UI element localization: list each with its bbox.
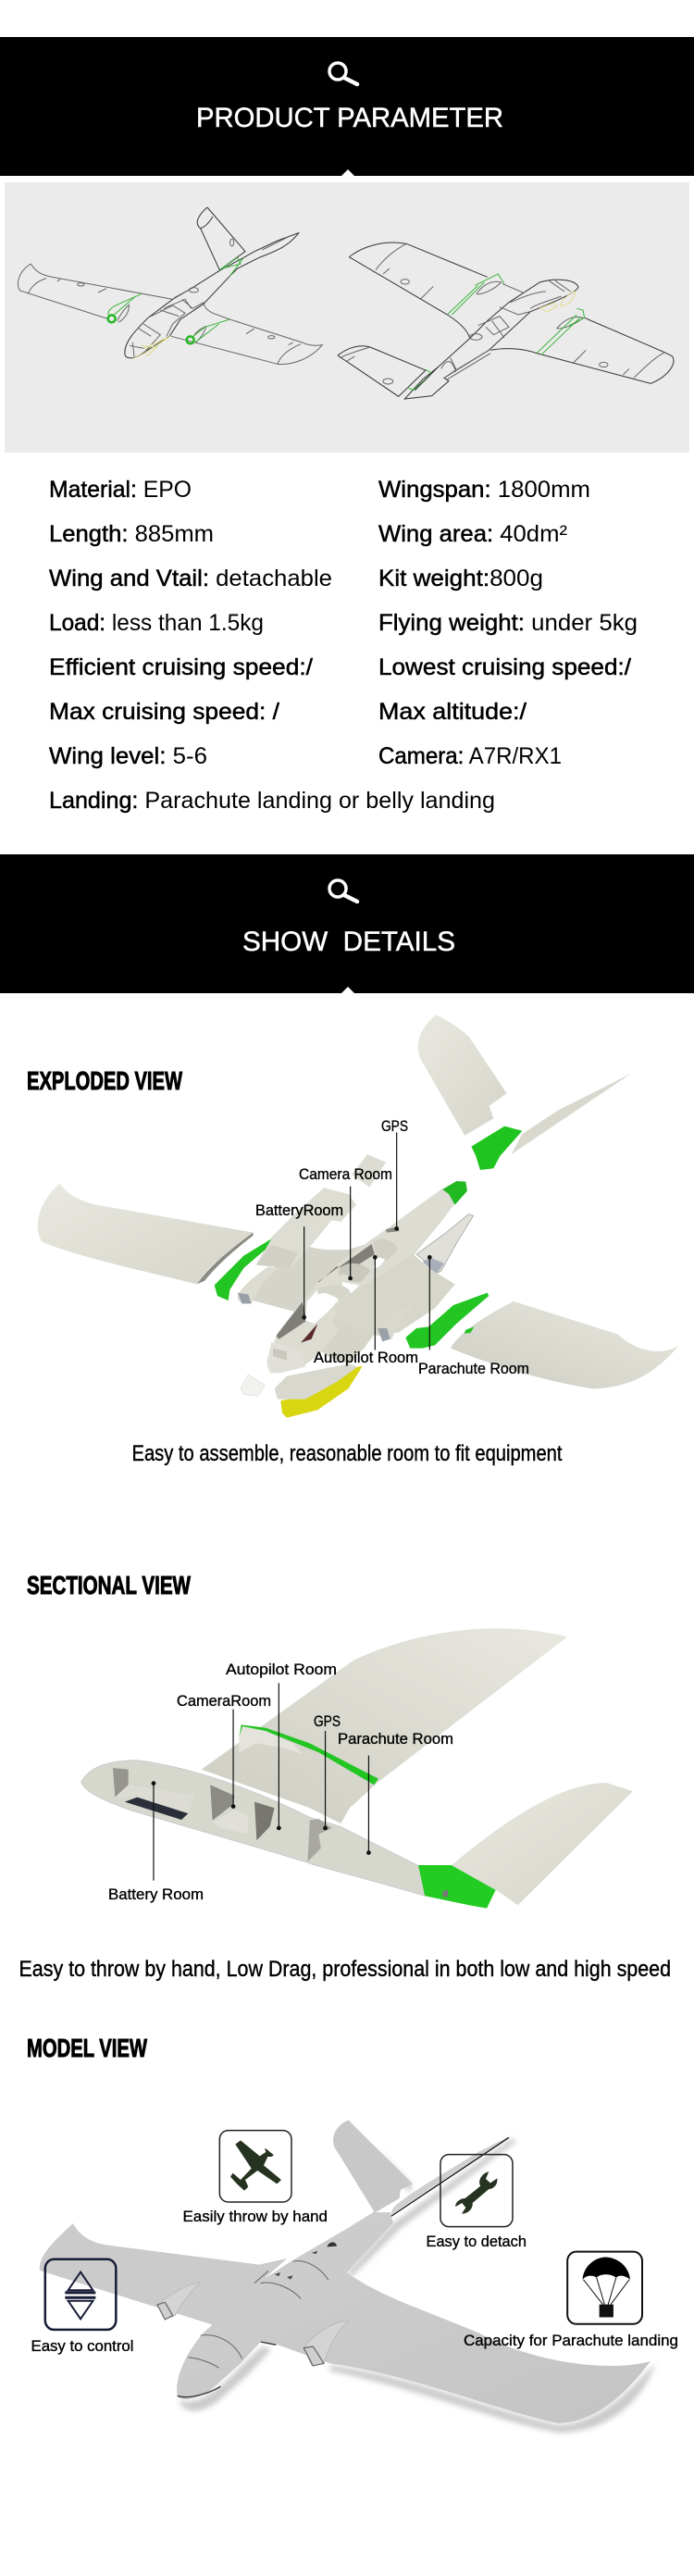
- drawing: wireframe plane left: [18, 207, 322, 365]
- label: parachute room: Parachute Room: [418, 1360, 529, 1377]
- header band: product parameter: [0, 37, 694, 176]
- heading: show details: SHOW DETAILS: [242, 927, 455, 957]
- label: battery room: BatteryRoom: [255, 1201, 343, 1219]
- icon: up and down arrows: [65, 2272, 95, 2319]
- section: model view: [27, 2034, 678, 2433]
- spec: wing area: Wing area: 40dm²: [378, 521, 567, 547]
- spec: efficient cruising speed: Efficient cruising speed:/: [49, 654, 313, 680]
- spec: material: Material: EPO: [49, 477, 192, 503]
- heading: exploded view: EXPLODED VIEW: [27, 1066, 182, 1095]
- icon: plane: [230, 2140, 281, 2191]
- icon: magnifier: [329, 880, 357, 902]
- icon: parachute: [582, 2257, 630, 2317]
- spec: wing level: Wing level: 5-6: [49, 743, 207, 769]
- heading: model view: MODEL VIEW: [27, 2034, 147, 2062]
- label: parachute room: Parachute Room: [338, 1730, 453, 1748]
- heading: sectional view: SECTIONAL VIEW: [27, 1571, 191, 1599]
- section: exploded view: [27, 1014, 679, 1466]
- label: autopilot room: Autopilot Room: [226, 1661, 337, 1678]
- label: easy to control: Easy to control: [31, 2337, 133, 2355]
- label: capacity for parachute landing: Capacity for Parachute landing: [464, 2332, 678, 2349]
- label: battery room: Battery Room: [108, 1885, 204, 1903]
- label: camera room: Camera Room: [299, 1165, 392, 1183]
- heading: product parameter: PRODUCT PARAMETER: [196, 103, 503, 133]
- spec: kit weight: Kit weight:800g: [378, 566, 543, 591]
- icon: magnifier: [329, 63, 357, 84]
- spec list: [49, 477, 638, 814]
- card: easy to detach: [426, 2155, 527, 2250]
- panel: wireframe drawings: [5, 182, 689, 453]
- spec: max altitude: Max altitude:/: [378, 699, 527, 725]
- illustration: assembled plane: [40, 2121, 655, 2433]
- illustration: sectional plane: [81, 1628, 633, 1909]
- illustration: exploded fuselage: [215, 1181, 489, 1418]
- spec: wingspan: Wingspan: 1800mm: [378, 477, 590, 503]
- spec: wing and vtail: Wing and Vtail: detachable: [49, 566, 332, 591]
- spec: camera: Camera: A7R/RX1: [378, 743, 562, 769]
- label: easy to detach: Easy to detach: [426, 2233, 527, 2250]
- spec: length: Length: 885mm: [49, 521, 214, 547]
- label: autopilot room: Autopilot Room: [314, 1349, 418, 1366]
- leader lines: [302, 1132, 432, 1350]
- label: camera room: CameraRoom: [177, 1692, 271, 1710]
- card: easy to control: [31, 2259, 133, 2355]
- spec: lowest cruising speed: Lowest cruising speed:/: [378, 654, 631, 680]
- spec: flying weight: Flying weight: under 5kg: [378, 610, 638, 636]
- label: GPS: GPS: [381, 1117, 408, 1135]
- header band: show details: [0, 854, 694, 993]
- drawing: wireframe plane right: [338, 243, 674, 399]
- icon: wrench: [455, 2172, 497, 2214]
- card: easily throw by hand: [183, 2131, 328, 2225]
- label: easily throw by hand: Easily throw by hand: [183, 2208, 328, 2225]
- section: sectional view: [19, 1571, 671, 1982]
- card: capacity for parachute landing: [464, 2252, 678, 2349]
- spec: landing: Landing: Parachute landing or belly landing: [49, 788, 495, 814]
- spec: load: Load: less than 1.5kg: [49, 610, 264, 636]
- leader lines: [152, 1683, 371, 1881]
- caption: exploded view: Easy to assemble, reasonable room to fit equipment: [131, 1441, 563, 1466]
- illustration: detached wings and tail: [38, 1014, 679, 1388]
- spec: max cruising speed: Max cruising speed: /: [49, 699, 279, 725]
- label: GPS: GPS: [314, 1712, 341, 1730]
